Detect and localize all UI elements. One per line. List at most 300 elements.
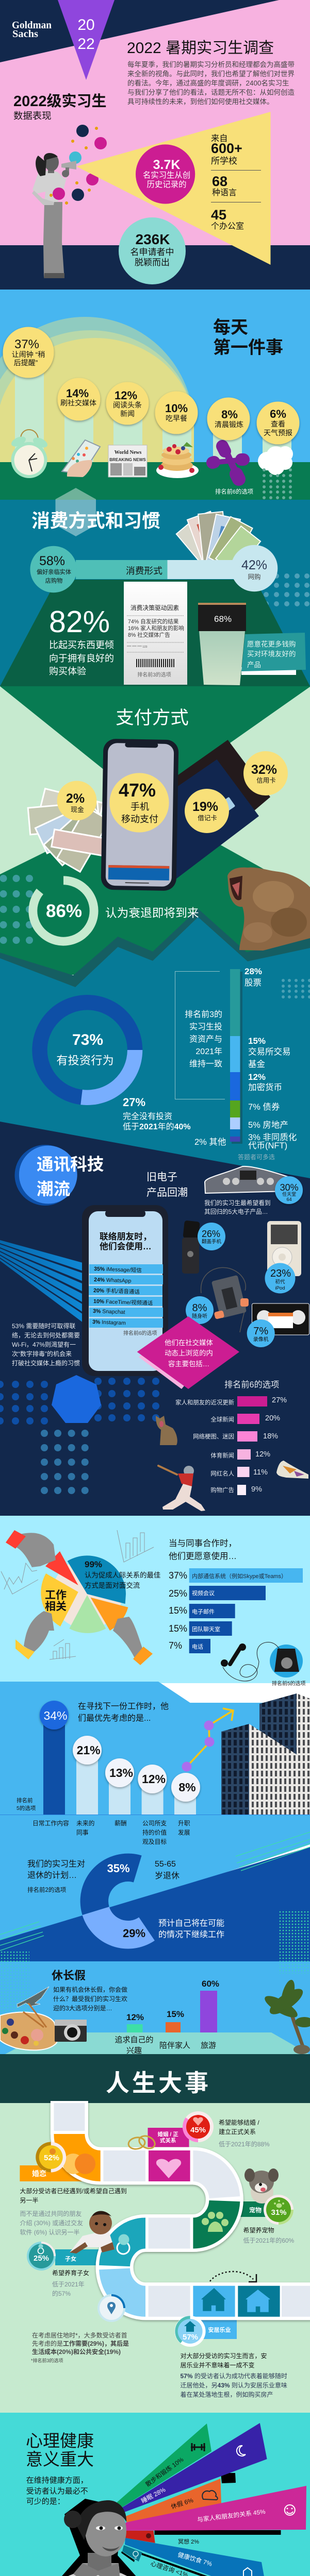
badge 26%: 26% — [202, 1229, 220, 1239]
badge 25% — [27, 2242, 56, 2270]
intro: 受访者认为最必不 — [26, 2487, 88, 2496]
text: pets: 低于2021年的60% — [243, 2236, 295, 2244]
stat: 600+ schools — [211, 134, 261, 171]
donut 73% invest: 有投资行为 — [56, 1054, 114, 1067]
heading: tech trends — [14, 1145, 104, 1206]
bars: preferred channels: 团队聊天室 — [192, 1625, 220, 1633]
sabbatical heading — [52, 1969, 127, 2012]
bar: how they spend — [76, 560, 234, 579]
icon: overlapping circles — [63, 2154, 95, 2174]
text: partner: 软件 (6%) 认识另一半 — [20, 2229, 79, 2236]
circle 19%: 19% — [192, 800, 218, 814]
badge 45% — [183, 2111, 214, 2142]
asset labels: 股票 — [244, 978, 262, 988]
stat 99%: 方式是面对面交流 — [85, 1581, 140, 1589]
heading: work-related: 相关 — [45, 1601, 67, 1613]
circle: 3.7K interns — [136, 144, 195, 204]
heading: 消费方式和习惯 — [31, 511, 160, 531]
circle 2% — [57, 781, 96, 820]
receipt: 16% 家人和朋友的影响 — [128, 625, 184, 632]
badge 30% Nintendo: 任天堂 — [282, 1191, 296, 1197]
bubble 14%: 刷社交媒体 — [60, 399, 96, 407]
icon: newspaper — [108, 445, 147, 477]
ring 86% recession: 认为衰退即将到来 — [105, 906, 199, 920]
axis labels — [17, 1797, 190, 1845]
asset labels: 2% 其他 — [194, 1137, 226, 1147]
heading — [26, 2431, 94, 2469]
donut 73% invest: 73% — [72, 1031, 103, 1048]
circle 47%: 47% — [119, 779, 156, 801]
ring 86% recession: 86% — [46, 901, 82, 921]
mint floor — [4, 2032, 310, 2055]
dots upper right — [282, 979, 310, 998]
section: first thing every day — [0, 290, 310, 500]
bubble 8%: 8% — [221, 408, 238, 421]
intro paragraph: 每年夏季，我们的暑期实习分析员和经理都会为高盛带 — [127, 60, 295, 69]
badge 7%: 7% — [253, 1326, 268, 1337]
retirement wedges — [80, 1854, 155, 1949]
bubble 6% — [257, 402, 299, 444]
icon: newspaper: World News — [115, 450, 141, 455]
stat: 45 offices: 45 — [211, 207, 226, 223]
badge 52% dating — [36, 2142, 66, 2172]
circle: 236K applicants: 脱颖而出 — [135, 258, 170, 267]
circle 47%: 移动支付 — [121, 814, 158, 824]
fan labels: 健康饮食 7% — [177, 2550, 213, 2568]
palm trees — [262, 1978, 310, 2054]
bubble 37%: 后提醒” — [14, 359, 38, 367]
bracket note: 2021年 — [195, 1047, 222, 1056]
section: investing background — [0, 909, 310, 1185]
circle 2%: 2% — [66, 791, 85, 806]
badge 52% dating: 52% — [44, 2154, 59, 2162]
bars: preferred channels: 15% — [169, 1605, 187, 1616]
badge 8%: 8% — [192, 1302, 207, 1314]
fan labels — [140, 2455, 266, 2576]
text: where to live: 在考虑居住地时*，大多数受访者首 — [32, 2331, 127, 2339]
text: kids: 的57% — [52, 2290, 71, 2297]
retirement text: 的情况下继续工作 — [158, 1930, 224, 1939]
asset labels: 基金 — [248, 1059, 265, 1069]
badge 30% Nintendo — [275, 1176, 303, 1204]
retirement text: 岁退休 — [155, 1871, 180, 1880]
badge 30% Nintendo: 30% — [280, 1182, 299, 1193]
band: dark blue retirement — [0, 1847, 310, 2055]
cash fan — [28, 789, 110, 872]
bubble 10%: 10% — [165, 402, 188, 415]
asset labels: 7% 债券 — [248, 1102, 280, 1112]
bubble 8%: 清晨锻炼 — [215, 420, 243, 429]
diamond callout: 动态上浏览的内 — [165, 1349, 213, 1357]
badge 25%: 25% — [34, 2254, 49, 2263]
column chart: next job: 12% — [142, 1772, 166, 1786]
bracket note — [175, 972, 225, 1099]
stat 82%: 购买体验 — [49, 666, 86, 676]
intro: 在维持健康方面， — [26, 2476, 88, 2485]
bubble 10%: 吃早餐 — [166, 414, 187, 422]
sabbatical heading: 如果有机会休长假，你会做 — [53, 1986, 127, 1993]
bars: preferred channels: 25% — [169, 1588, 187, 1599]
heading: 心理健康 — [26, 2431, 94, 2450]
intro — [26, 2476, 88, 2506]
bubble 37%: 让闹钟 “稍 — [12, 350, 45, 359]
bracket note: 资资产与 — [189, 1035, 222, 1044]
dots left — [0, 875, 33, 944]
intro: 可少的是： — [26, 2497, 65, 2506]
badge 8%: 随身听 — [192, 1313, 207, 1319]
note — [204, 1199, 271, 1215]
cuffs — [6, 1530, 153, 1665]
bar chart: social feed: 网红名人 — [210, 1470, 234, 1477]
note: multiple answers: 答题者可多选 — [238, 1153, 275, 1161]
sabbatical heading: 什么？最受我们的实习生欢 — [53, 1995, 127, 2003]
dot fields — [1, 1910, 310, 2015]
text: settling: 对大部分受访的实习生而言，安 — [181, 2352, 267, 2360]
text: kids: 希望养育子女 — [52, 2269, 89, 2277]
label: dating: 婚恋 — [32, 2170, 46, 2178]
decorative dots behind cone — [65, 125, 107, 205]
circle 58%: 58% — [39, 554, 65, 568]
rotary telephone — [221, 1642, 303, 1681]
purple triangle with year: 20 — [77, 16, 95, 33]
intro paragraph: 具可持续性的未来，到他们如何使用社交媒体。 — [127, 97, 273, 106]
badge 23% — [265, 1263, 295, 1293]
stacked column: assets — [230, 969, 242, 1144]
asset labels — [194, 967, 297, 1150]
bar chart: social feed — [175, 1380, 287, 1495]
heading: tech trends: 潮流 — [37, 1179, 70, 1198]
buildings — [221, 1693, 310, 1815]
cat — [156, 1416, 177, 1445]
section background: header — [0, 0, 310, 290]
stat: 68 languages: 68 — [212, 174, 227, 189]
job question — [78, 1702, 169, 1723]
asset labels: 加密货币 — [248, 1082, 282, 1092]
label: marriage — [157, 2131, 178, 2144]
bars: preferred channels — [169, 1568, 303, 1653]
text: partner: 而不是通过共同的朋友 — [20, 2210, 81, 2217]
woman with megaphone — [32, 153, 76, 278]
heading: work-related: 工作 — [45, 1589, 67, 1601]
doodle charts — [1, 1530, 154, 1659]
bubble 8% — [207, 398, 250, 440]
cup with 68%: 68% — [214, 614, 232, 624]
circle 47%: 手机 — [130, 802, 149, 812]
fan labels: 休假 6% — [170, 2497, 194, 2511]
retirement text: 排名前2的选项 — [27, 1886, 67, 1893]
subheading — [13, 93, 107, 121]
text: settling — [181, 2352, 287, 2398]
circle 19%: 借记卡 — [198, 815, 217, 822]
circle 42%: 42% — [241, 558, 267, 572]
bracket note: 排名前3的 — [185, 1010, 222, 1019]
donut 73% invest — [40, 1003, 142, 1105]
baseball player — [158, 1466, 205, 1511]
stat 99% — [85, 1560, 160, 1589]
note 27%: 完全没有投资 — [123, 1112, 172, 1121]
fan labels: 散步和锻炼 10% — [144, 2455, 185, 2488]
bars: sabbatical: 旅游 — [201, 2041, 216, 2050]
section background: work — [0, 1516, 310, 1947]
board road — [69, 2101, 310, 2301]
big phone with messaging list: 35% iMessage/短信 — [94, 1265, 142, 1274]
note: 其回归的5大电子产品… — [204, 1208, 268, 1215]
asset labels: 15% — [248, 1036, 266, 1046]
blue rays — [0, 1240, 89, 1327]
badge 23%: iPod — [275, 1285, 285, 1291]
VHS tape — [252, 1303, 309, 1335]
fan labels: 冥想 2% — [178, 2538, 199, 2545]
bubble 14% — [58, 378, 100, 420]
axis labels: 升职 — [178, 1820, 190, 1827]
column chart: next job — [0, 1701, 310, 1815]
purple triangle with year — [58, 0, 115, 80]
retirement wedges: 35% — [107, 1862, 130, 1875]
growth arrow — [182, 1708, 233, 1771]
heptagon — [52, 1375, 101, 1423]
text: digital detox: 打破社交媒体上瘾的习惯 — [12, 1359, 80, 1367]
heading: tech trends: 通讯科技 — [37, 1155, 104, 1174]
axis labels: 日常工作内容 — [32, 1820, 69, 1827]
asset labels: 3% 非同质化 — [248, 1132, 297, 1142]
job question: 们最优先考虑的是... — [78, 1714, 151, 1723]
bubble 37%: 37% — [14, 337, 39, 351]
icon: dumbbells — [212, 446, 243, 479]
logo: Goldman Sachs: Sachs — [12, 28, 38, 40]
dots blue — [0, 1378, 159, 1425]
bars: preferred channels: 电话 — [192, 1643, 203, 1650]
section background: mental health — [0, 2413, 310, 2576]
big phone with messaging list: 3% Instagram — [92, 1319, 126, 1326]
label strips under road — [20, 2128, 269, 2339]
big phone with messaging list: 20% 手机/语音通话 — [93, 1287, 140, 1295]
bars: preferred channels: 电子邮件 — [192, 1608, 215, 1615]
receipt: **** **** **** 123 — [127, 646, 147, 649]
badge 26%: 翻盖手机 — [202, 1239, 221, 1245]
board cells — [69, 2103, 310, 2301]
fan labels: 与家人和朋友的关系 45% — [197, 2508, 266, 2523]
bear — [227, 868, 310, 951]
bracket note: 实习生投 — [189, 1022, 222, 1031]
retirement text: 退休的计划… — [27, 1871, 77, 1880]
icon: phone in hand — [62, 440, 100, 477]
bubble 12%: 阅读头条 — [113, 401, 142, 409]
retirement text: 55-65 — [155, 1860, 176, 1869]
column chart: next job: 13% — [109, 1766, 133, 1780]
stat: 600+ schools: 所学校 — [211, 156, 237, 166]
Walkman — [201, 1267, 249, 1332]
fan icons — [133, 2443, 295, 2576]
subheading: 2022级实习生 — [13, 93, 107, 110]
bars: preferred channels: 37% — [169, 1570, 187, 1581]
intro paragraph: 来全新的视角。与此同时，我们也希望了解他们对世界 — [127, 70, 295, 78]
circle 32%: 信用卡 — [256, 777, 276, 784]
icons: houses — [202, 2289, 270, 2312]
text: partner: 大部分受访者已经遇到/或希望自己遇到 — [20, 2187, 127, 2195]
bar chart: social feed: 9% — [251, 1485, 262, 1494]
asset labels: 交易所交易 — [248, 1047, 291, 1057]
subheading: 数据表现 — [13, 110, 52, 121]
receipt — [124, 582, 187, 685]
axis labels: 持的价值 — [142, 1829, 167, 1836]
asset labels: 28% — [244, 967, 262, 976]
sabbatical heading: 休长假 — [52, 1969, 86, 1982]
icon: alarm clock — [10, 430, 49, 478]
dots teal — [41, 1430, 89, 1494]
airplane — [17, 1987, 49, 2007]
question: 当与同事合作时， — [169, 1538, 237, 1548]
wedding rings — [127, 2133, 157, 2151]
section: payment background with zigzag — [0, 686, 310, 975]
circle: 3.7K interns: 历史记录的 — [147, 180, 186, 189]
label: kids: 子女 — [65, 2255, 76, 2262]
big phone with messaging list: 24% WhatsApp — [94, 1277, 132, 1284]
text: where to live: 生活成本(20%)和公共安全(19%) — [32, 2348, 121, 2355]
circle: 236K applicants — [119, 217, 186, 284]
bar chart: social feed: 全球新闻 — [210, 1416, 234, 1423]
bar chart: social feed: 12% — [255, 1450, 270, 1459]
bars — [15, 355, 291, 462]
sabbatical heading: 迎的3大选项分别是… — [53, 2004, 112, 2012]
icon: cloud — [258, 446, 293, 475]
note: eco-friendly — [241, 633, 306, 675]
stat 82% — [49, 605, 114, 676]
axis labels: 发展 — [178, 1829, 190, 1836]
paper fan: rays — [117, 2423, 306, 2576]
title: 2022 暑期实习生调查 — [127, 40, 274, 57]
axis labels: 薪酬 — [115, 1820, 127, 1827]
stat: 600+ schools: 600+ — [211, 141, 242, 156]
badge 7%: 录像机 — [253, 1336, 269, 1343]
icon: pacifier — [117, 2234, 129, 2254]
dark green trapezoid — [0, 580, 310, 686]
iPod — [267, 1221, 301, 1276]
circle 58%: 店购物 — [45, 577, 62, 584]
baby — [70, 2211, 115, 2253]
intro paragraph: 的看法。今年，通过高盛的年度调研，2400名实习生 — [127, 79, 289, 87]
dashed arrow — [210, 2272, 256, 2282]
text: kids: 低于2021年 — [52, 2281, 85, 2288]
heading: 意义重大 — [26, 2450, 94, 2469]
bars: preferred channels: 7% — [169, 1640, 182, 1651]
vintage camera — [55, 2020, 87, 2042]
stat 82%: 比起买东西更倾 — [49, 640, 114, 650]
bars: sabbatical: 追求自己的 — [115, 2036, 154, 2044]
circle 47% — [109, 773, 169, 833]
note: top 5: 排名前5的选项 — [272, 1680, 306, 1687]
column chart: next job: 8% — [178, 1781, 196, 1794]
bracket note: 维持一致 — [189, 1059, 222, 1069]
note: 我们的实习生最希望看到 — [204, 1199, 271, 1207]
note 27%: 低于2021年的40% — [123, 1122, 191, 1131]
big phone with messaging list: 3% Snapchat — [93, 1308, 125, 1315]
dot on woman — [50, 188, 65, 200]
stat: 68 languages: 种语言 — [212, 188, 237, 197]
dot grid — [263, 468, 292, 499]
text: settling: 着在某处落地生根，例如购买房产 — [181, 2391, 273, 2398]
circle 58%: 偏好亲临实体 — [37, 568, 71, 575]
badge 7% — [247, 1319, 275, 1347]
receipt: 74% 自发研究的结果 — [128, 618, 179, 625]
big phone with messaging list — [82, 1205, 168, 1376]
text: settling: 57% 的受访者认为成功代表着能够随时 — [181, 2372, 287, 2380]
text: where to live: *排名前3的选项 — [31, 2358, 63, 2363]
text: partner — [20, 2187, 127, 2236]
retirement text: 预计自己将在可能 — [158, 1919, 224, 1928]
pie being pulled apart — [41, 1551, 128, 1633]
text: digital detox: 53% 需要随时可取得联 — [12, 1322, 75, 1330]
text: digital detox: Wi-Fi，47%则渴望有一 — [12, 1341, 76, 1348]
question: 他们更愿意使用… — [169, 1551, 237, 1561]
bubble 37% — [3, 327, 54, 378]
dog — [244, 2168, 279, 2204]
text: pets — [243, 2226, 295, 2244]
note: eco-friendly: 产品 — [247, 661, 261, 669]
axis labels: 未来的 — [76, 1820, 94, 1827]
asset labels: 5% 房地产 — [248, 1120, 288, 1130]
circle: 236K applicants: 名申请者中 — [130, 247, 174, 257]
big phone with messaging list: 联络朋友时， — [100, 1231, 152, 1242]
bars: sabbatical: 陪伴家人 — [159, 2041, 190, 2050]
bars: preferred channels: 内部通信系统（例如Skype或Teams） — [192, 1572, 287, 1580]
circle: 3.7K interns: 3.7K — [153, 158, 180, 172]
text: digital detox — [12, 1322, 80, 1367]
bar chart: social feed: 排名前6的选项 — [224, 1380, 279, 1389]
text: settling: 迁居他处，另43% 则认为安居乐业意味 — [181, 2381, 287, 2389]
icon: pancakes — [156, 442, 199, 478]
bar chart: social feed: 20% — [265, 1414, 280, 1422]
bubble 10% — [155, 392, 198, 434]
column chart: next job: 34% — [43, 1709, 68, 1722]
N64 console — [205, 1166, 289, 1193]
big phone with messaging list: 排名前6的选项 — [123, 1330, 157, 1336]
heading: 支付方式 — [116, 707, 189, 728]
badge 23%: 初代 — [275, 1279, 285, 1285]
diamond callout: 他们在社交媒体 — [165, 1338, 213, 1347]
retirement wedges: 29% — [123, 1927, 145, 1940]
text: partner: 介绍 (30%) 或通过交友 — [20, 2219, 83, 2227]
bars: sabbatical: 60% — [202, 1979, 219, 1989]
bar chart: social feed: 11% — [253, 1468, 268, 1477]
banner: life events — [0, 2054, 310, 2103]
heading: 第一件事 — [213, 338, 283, 358]
badge 31%: 31% — [271, 2208, 287, 2217]
bar chart: social feed: 购物广告 — [210, 1486, 234, 1494]
circle 58% — [30, 546, 77, 592]
bar chart: social feed: 27% — [272, 1396, 287, 1404]
section background: life events — [0, 2103, 310, 2413]
bar chart: social feed: 家人和朋友的近况更新 — [175, 1399, 234, 1406]
stat: 45 offices — [211, 207, 244, 231]
stat: 45 offices: 个办公室 — [211, 222, 244, 231]
note: top 6: 排名前6的选项 — [215, 488, 253, 495]
banner: life events: 人生大事 — [106, 2070, 211, 2096]
logo: Goldman Sachs: Goldman — [12, 20, 52, 31]
stat 99%: 认为促成人际关系的最佳 — [85, 1571, 160, 1579]
receipt: 消费决策驱动因素 — [130, 604, 179, 612]
badge 26% — [198, 1223, 225, 1250]
bubble 6%: 天气预报 — [264, 429, 292, 437]
circle 2%: 现金 — [71, 806, 84, 814]
retirement text — [27, 1859, 224, 1939]
banknotes — [175, 511, 261, 560]
fan labels: 睡眠 28% — [140, 2486, 167, 2505]
big phone with messaging list: 他们会使用… — [100, 1241, 152, 1251]
heading: 每天 — [213, 318, 248, 337]
text: where to live: 先考虑的是工作需要(29%)，其后是 — [32, 2340, 129, 2347]
icon: paw — [202, 2212, 229, 2232]
cup with 68% — [198, 603, 246, 685]
